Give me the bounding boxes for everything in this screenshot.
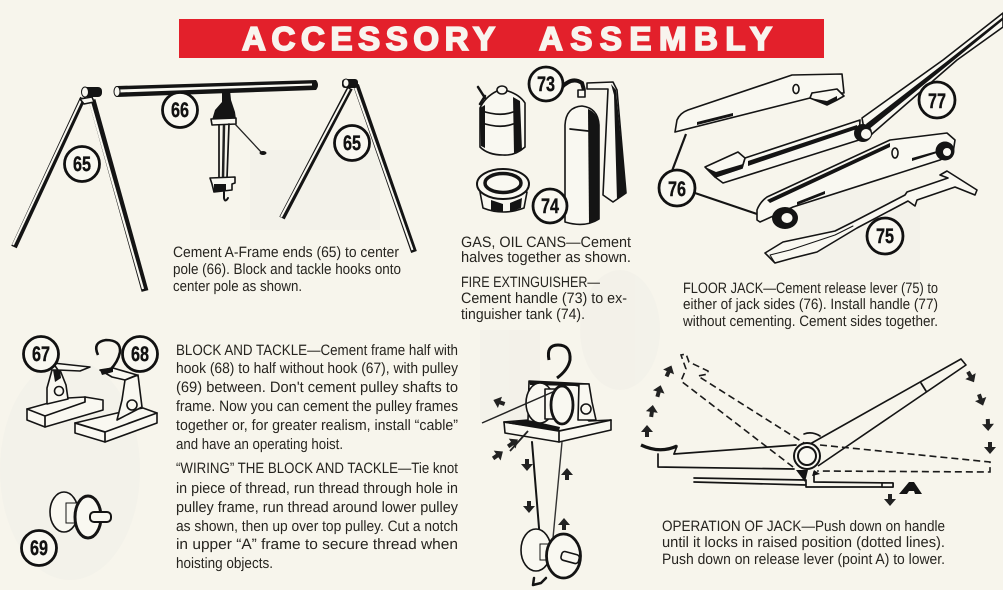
handle (77) [705,13,1003,183]
title banner: ASSEMBLY [539,20,772,57]
jack side lower (76) and callout lines [659,133,955,229]
A-frame instructions: Cement A-Frame ends (65) to center [173,244,399,261]
block and tackle instructions: BLOCK AND TACKLE—Cement frame half with [176,342,458,359]
background show-through [0,150,920,580]
pulley (69): 69 [30,537,48,560]
block and tackle instructions: and have an operating hoist. [176,436,343,453]
cans instructions [461,234,632,323]
A-frame instructions [173,244,401,295]
cans instructions: FIRE EXTINGUISHER— [461,274,600,291]
fire extinguisher handle and tank [529,67,626,224]
pulley (69) [22,492,111,566]
cans instructions: Cement handle (73) to ex- [461,290,627,307]
jack operation instructions: Push down on release lever (point A) to lower. [662,551,945,568]
title banner: ACCESSORY [242,20,495,57]
block and tackle instructions: as shown, then up over top pulley. Cut a notch [176,518,458,535]
block and tackle instructions: together or, for greater realism, install “cable” [176,417,458,434]
floor jack instructions [682,280,938,330]
wiring diagram: block and tackle [482,345,611,585]
block and tackle instructions [176,342,459,572]
oil can base ring [477,169,529,212]
jack operation diagram [641,354,996,506]
A-frame end left (65): 65 [73,153,91,176]
frame halves 67 and 68 [24,336,158,442]
gas can [478,86,525,155]
A-frame instructions: center pole as shown. [173,278,302,295]
jack operation instructions [662,518,945,568]
handle (77): 77 [928,90,946,113]
floor jack instructions: without cementing. Cement sides together. [682,313,938,330]
floor jack instructions: either of jack sides (76). Install handle (77) [683,296,938,313]
release lever (75) [765,171,977,263]
block and tackle instructions: “WIRING” THE BLOCK AND TACKLE—Tie knot [176,460,459,477]
floor jack instructions: FLOOR JACK—Cement release lever (75) to [683,280,938,297]
A-frame end left (65) [13,87,145,291]
A-frame end right (65): 65 [343,132,361,155]
jack operation instructions: OPERATION OF JACK—Push down on handle [662,518,945,535]
block and tackle on pole [210,90,266,200]
jack side upper (76) [675,74,844,132]
jack operation instructions: until it locks in raised position (dotted lines). [662,534,945,551]
label 75: 75 [876,225,894,248]
block and tackle instructions: hook (68) to half without hook (67), with pulley [176,360,458,377]
cans instructions: tinguisher tank (74). [461,306,585,323]
label 75 [867,218,903,254]
fire extinguisher handle and tank: 73 [537,73,555,96]
block and tackle instructions: pulley frame, run thread around lower pulley [176,499,458,516]
title banner [179,19,824,58]
A-frame instructions: pole (66). Block and tackle hooks onto [173,261,401,278]
center pole (66): 66 [171,99,189,122]
frame halves 67 and 68: 68 [131,343,149,366]
center pole (66) [114,80,318,128]
fire extinguisher handle and tank: 74 [541,195,559,218]
cans instructions: halves together as shown. [461,249,631,266]
block and tackle instructions: hoisting objects. [176,555,273,572]
block and tackle instructions: (69) between. Don't cement pulley shafts to [176,379,458,396]
A-frame end right (65) [281,79,414,252]
cans instructions: GAS, OIL CANS—Cement [461,234,632,251]
block and tackle instructions: in upper “A” frame to secure thread when [176,536,458,553]
block and tackle instructions: frame. Now you can cement the pulley frames [176,398,458,415]
jack side lower (76) and callout lines: 76 [668,178,686,201]
frame halves 67 and 68: 67 [32,343,50,366]
block and tackle instructions: in piece of thread, run thread through hole in [176,480,458,497]
